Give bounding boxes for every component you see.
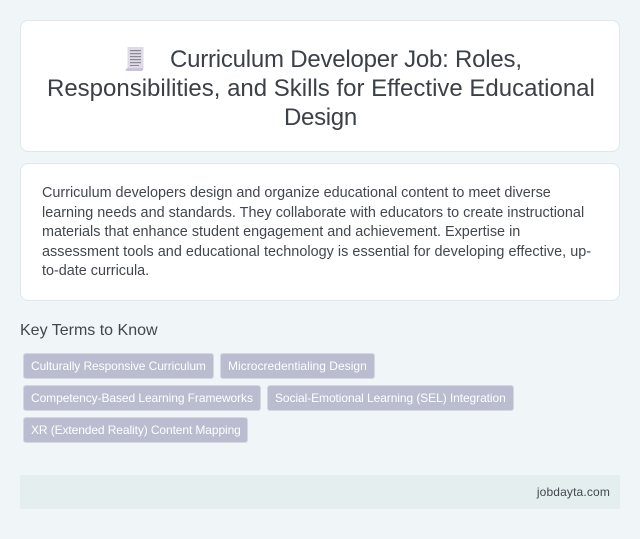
- tag: competency-based learning frameworks: Competency-Based Learning Frameworks: [31, 391, 253, 405]
- title: line 2: Responsibilities, and Skills for Effective Educational: [47, 75, 595, 102]
- tag: microcredentialing design: [220, 353, 375, 379]
- text: description line 4: assessment tools and educational technology is essential for developing effective, up-: [42, 244, 591, 260]
- text: description line 5: to-date curricula.: [42, 263, 149, 279]
- text: description line 1: Curriculum developers design and organize educational content to meet diverse: [42, 185, 551, 201]
- title: line 3: Design: [284, 104, 357, 131]
- text: description line 2: learning needs and standards. They collaborate with educators to create instructional: [42, 205, 584, 221]
- tag: social-emotional learning integration: Social-Emotional Learning (SEL) Integration: [275, 391, 506, 405]
- tag: xr content mapping: XR (Extended Reality) Content Mapping: [31, 423, 241, 437]
- tag: culturally responsive curriculum: Culturally Responsive Curriculum: [31, 359, 206, 373]
- footer: site name: jobdayta.com: [537, 485, 610, 499]
- tag: microcredentialing design: Microcredentialing Design: [228, 359, 367, 373]
- tag: social-emotional learning integration: [267, 385, 514, 411]
- heading: key terms: Key Terms to Know: [20, 322, 158, 339]
- footer bar: [20, 475, 620, 509]
- title: line 1: Curriculum Developer Job: Roles,: [170, 46, 522, 73]
- tag: xr content mapping: [23, 417, 248, 443]
- text: description line 3: materials that enhance student engagement and achievement. Expertise in: [42, 224, 520, 240]
- panel: title card: [20, 20, 620, 152]
- panel: description card: [20, 163, 620, 301]
- icon: document scroll: [125, 47, 144, 71]
- tag: competency-based learning frameworks: [23, 385, 261, 411]
- tag: culturally responsive curriculum: [23, 353, 214, 379]
